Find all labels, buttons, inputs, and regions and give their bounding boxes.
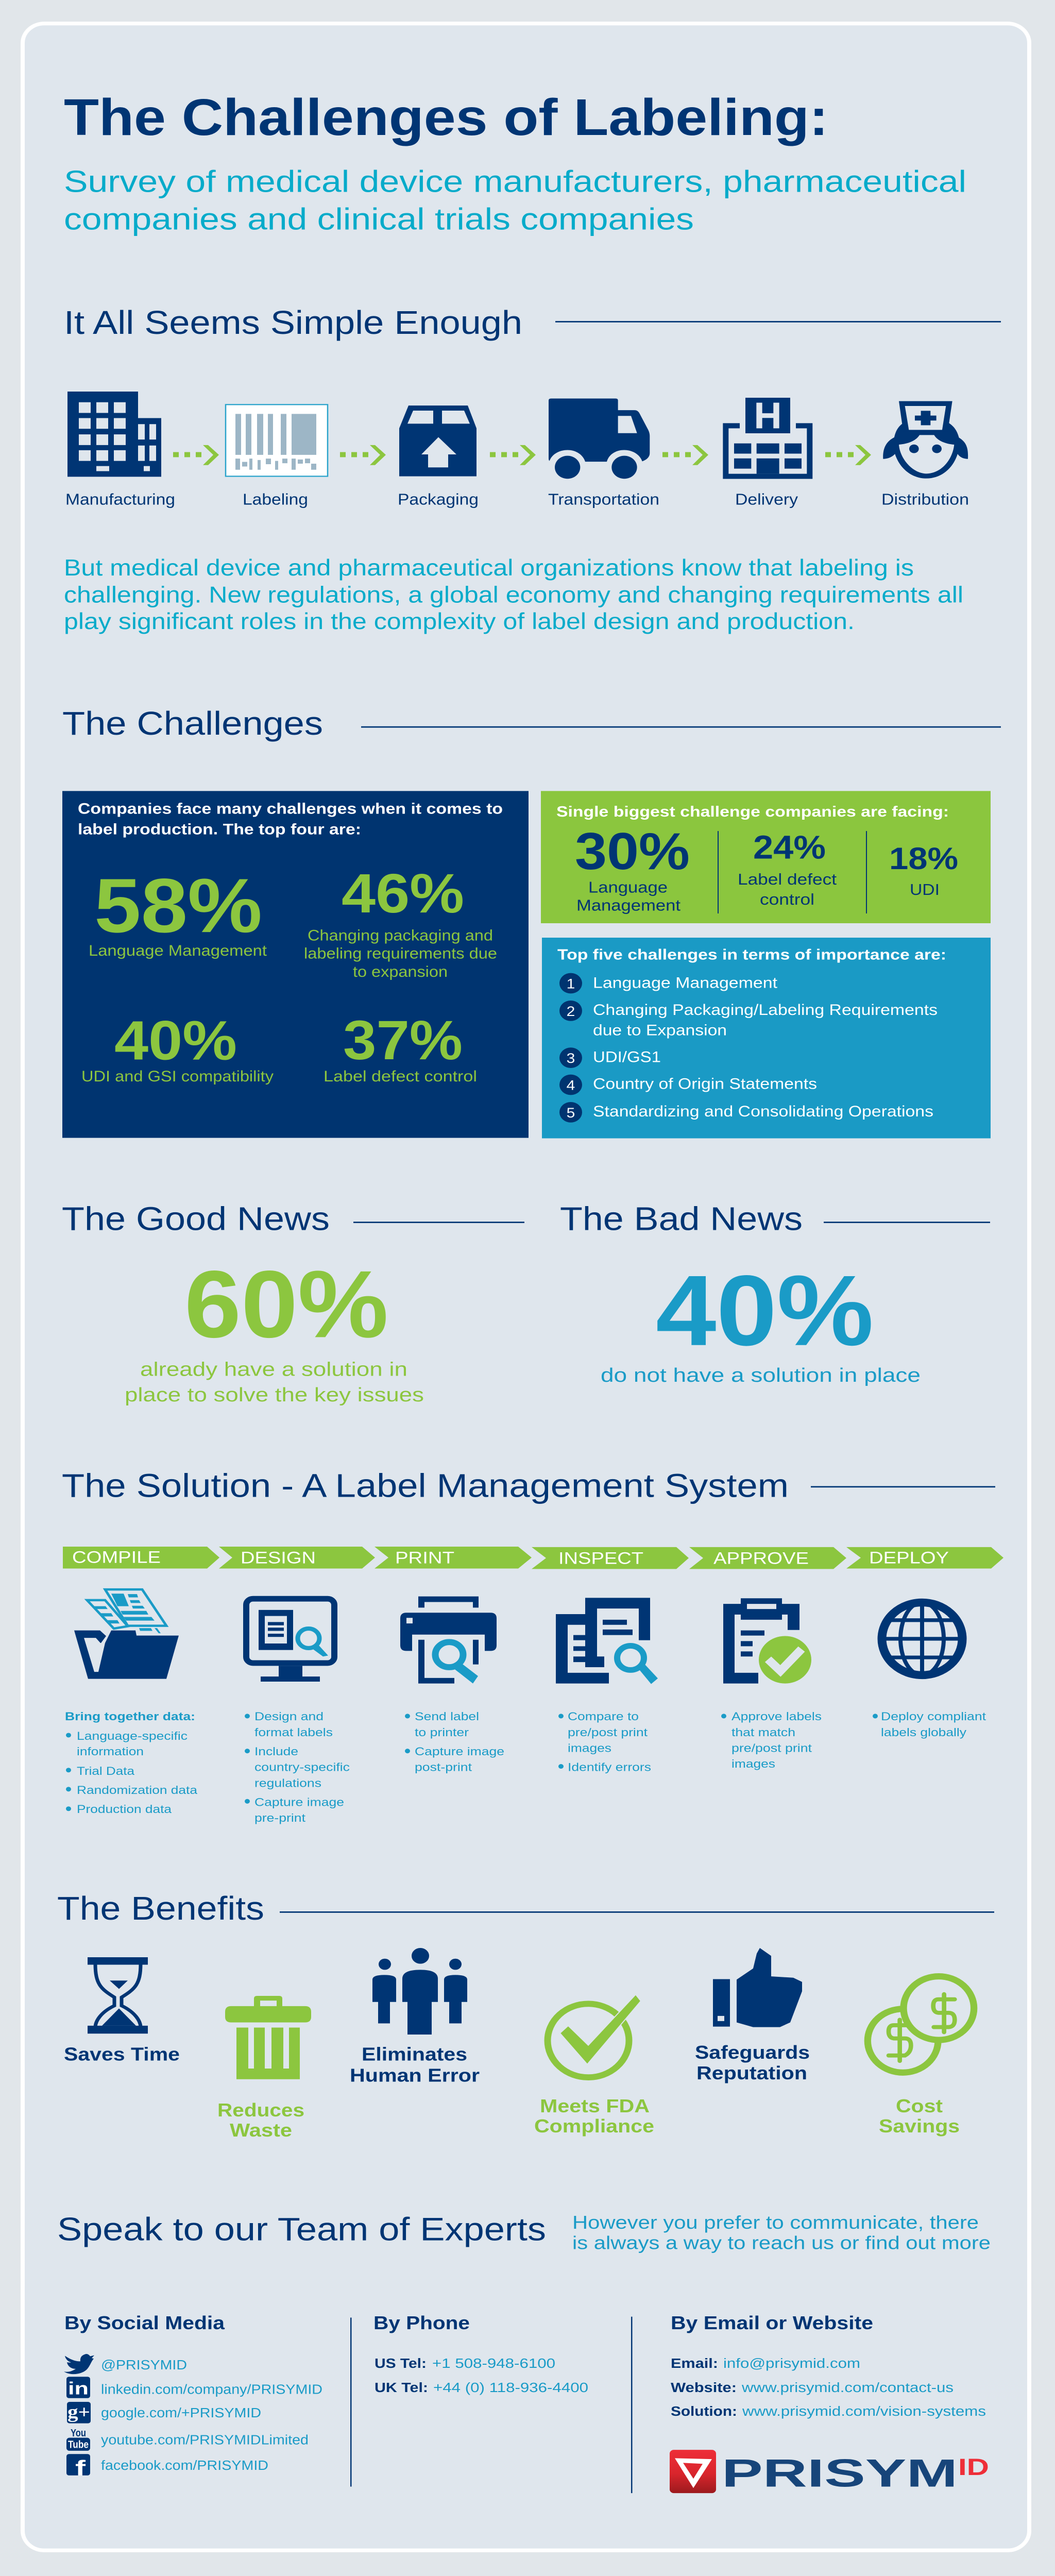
stat: 30%: 30%	[575, 822, 690, 880]
step text: inspect: Identify errors	[568, 1761, 651, 1774]
benefit: saves time: Saves Time	[64, 2044, 180, 2065]
chevron: compile	[63, 1547, 219, 1568]
benefit: reduces waste	[217, 1996, 311, 2141]
logo: PRISYM ID: ID	[958, 2454, 989, 2480]
arrow 5	[825, 445, 871, 465]
chevron: print: PRINT	[395, 1549, 454, 1567]
contact column: social media: By Social Media	[64, 2313, 225, 2334]
contact column: email or website	[671, 2313, 986, 2419]
contact column: email or website: www.prisymid.com/vision-systems	[742, 2403, 986, 2419]
icon: manufacturing	[67, 392, 161, 477]
stat: 37%: Label defect control	[324, 1068, 477, 1085]
contact intro text: However you prefer to communicate, there	[572, 2212, 979, 2233]
heading: Speak to our Team of Experts: Speak to our Team of Experts	[57, 2212, 546, 2248]
icon: barcode label	[226, 404, 328, 476]
step text: inspect: Compare to	[568, 1710, 639, 1723]
process step labels: Delivery	[735, 490, 798, 508]
panel heading: label production. The top four are:	[78, 821, 361, 838]
step text: print: post-print	[415, 1761, 472, 1774]
icon: facebook: f	[75, 2456, 86, 2480]
arrow 2	[340, 445, 386, 465]
stat: 46%: 46%	[342, 862, 464, 925]
chevron: deploy	[846, 1547, 1003, 1568]
step text: design: country-specific	[254, 1761, 350, 1774]
stat: 60% good news: place to solve the key issues	[125, 1384, 424, 1406]
step text: approve	[721, 1710, 822, 1771]
icon: linkedin	[66, 2377, 90, 2398]
process step labels: Distribution	[881, 490, 969, 508]
contact intro text	[572, 2212, 991, 2253]
icon: google plus: g+	[67, 2402, 90, 2422]
list item 1: Language Management	[593, 974, 777, 991]
stat: 30%: Management	[576, 896, 680, 914]
heading: The Solution: The Solution - A Label Management System	[62, 1467, 789, 1504]
contact column: social media: @PRISYMID	[101, 2357, 187, 2372]
icon: globe	[882, 1602, 962, 1675]
icon: truck	[549, 399, 650, 479]
benefit: safeguards reputation: Reputation	[696, 2063, 807, 2083]
heading: The Bad News: The Bad News	[560, 1201, 803, 1238]
heading: The Challenges: The Challenges	[62, 705, 323, 742]
heading: The Good News: The Good News	[62, 1201, 330, 1238]
stat: 58%: Language Management	[89, 942, 267, 959]
icon: trash can	[225, 1996, 311, 2079]
icon: youtube: You	[71, 2427, 86, 2439]
step text: design: Include	[254, 1745, 298, 1758]
step text: compile: information	[77, 1745, 144, 1758]
icon: package	[399, 405, 477, 476]
panel: single biggest challenge	[541, 791, 991, 923]
step text: deploy	[873, 1710, 986, 1739]
step text: deploy: labels globally	[881, 1726, 966, 1739]
chevron: design: DESIGN	[241, 1549, 316, 1567]
stat: 46%	[304, 862, 497, 980]
icon: twitter	[64, 2354, 94, 2374]
step text: design: format labels	[254, 1726, 333, 1739]
contact column: email or website: Email:	[671, 2355, 718, 2371]
stat: 60% good news: 60%	[184, 1251, 388, 1358]
subtitle: Survey of medical device manufacturers, pharmaceutical	[64, 164, 966, 199]
icon: linkedin: in	[68, 2378, 89, 2398]
chevron: design	[219, 1547, 375, 1568]
icon: hourglass	[88, 1957, 148, 2033]
list item 3: 3	[567, 1050, 575, 1066]
step text: inspect: images	[568, 1742, 611, 1755]
panel: top five challenges	[542, 938, 991, 1138]
icon: youtube	[66, 2427, 90, 2451]
stat: 60% good news: already have a solution in	[140, 1359, 407, 1380]
list item 2: Changing Packaging/Labeling Requirements	[593, 1001, 938, 1019]
benefit: cost savings	[867, 1976, 974, 2137]
stat: 40%: 40%	[114, 1010, 237, 1072]
process step labels: Packaging	[398, 490, 479, 508]
step text: compile: Language-specific	[77, 1730, 188, 1743]
step text: print: to printer	[415, 1726, 469, 1739]
step text: approve: that match	[731, 1726, 795, 1739]
stat: 40%: UDI and GSI compatibility	[81, 1068, 274, 1085]
step text: print: Capture image	[415, 1745, 504, 1758]
step text: approve: pre/post print	[731, 1742, 812, 1755]
icon: youtube: Tube	[68, 2438, 89, 2450]
panel heading: Top five challenges in terms of importance are:	[557, 946, 946, 963]
contact column: phone: +44 (0) 118-936-4400	[433, 2380, 588, 2395]
process step labels: Labeling	[243, 490, 308, 508]
contact column: phone: US Tel:	[375, 2355, 427, 2371]
stat: 24%: Label defect	[738, 870, 837, 888]
step text: design: Capture image	[254, 1795, 344, 1809]
contact column: social media: youtube.com/PRISYMIDLimited	[101, 2432, 309, 2447]
icon: check circle	[548, 2004, 629, 2077]
contact column: phone	[373, 2313, 588, 2395]
step text: print	[405, 1710, 504, 1774]
step text: design: pre-print	[254, 1811, 305, 1825]
stat: 40% bad news	[601, 1255, 921, 1386]
contact column: email or website: Website:	[671, 2380, 737, 2395]
subtitle: companies and clinical trials companies	[64, 202, 694, 236]
stat: 40% bad news: 40%	[656, 1255, 874, 1366]
benefit: reduces waste: Waste	[230, 2120, 292, 2141]
stat: 37%: 37%	[343, 1009, 463, 1072]
stat: 30%: Language	[588, 878, 668, 896]
process step labels: Manufacturing	[65, 490, 175, 508]
list item 2	[559, 1001, 938, 1039]
stat: 24%: control	[760, 890, 814, 908]
icon: folder with papers	[74, 1589, 179, 1679]
stat: 46%: to expansion	[353, 963, 448, 980]
benefit: safeguards reputation	[695, 1948, 810, 2083]
subtitle	[64, 164, 966, 236]
step text: inspect: pre/post print	[568, 1726, 648, 1739]
icon: coins	[867, 1976, 974, 2073]
step text: design: Design and	[254, 1710, 324, 1723]
chevron: compile: COMPILE	[72, 1548, 161, 1567]
benefit: cost savings: Savings	[879, 2116, 960, 2137]
arrow 4	[662, 445, 708, 465]
step text: print: Send label	[415, 1710, 479, 1723]
stat: 46%: labeling requirements due	[304, 945, 497, 962]
intro paragraph: challenging. New regulations, a global economy and changing requirements all	[64, 582, 963, 607]
step text: inspect	[558, 1710, 651, 1774]
title: The Challenges of Labeling:	[64, 89, 828, 146]
icon: thumbs up	[713, 1948, 802, 2027]
benefit: cost savings: Cost	[896, 2096, 943, 2116]
step text: compile: Bring together data:	[65, 1710, 195, 1723]
contact column: email or website: www.prisymid.com/contact-us	[741, 2380, 954, 2395]
contact column: social media: linkedin.com/company/PRISYMID	[101, 2382, 322, 2397]
step text: approve: images	[731, 1757, 775, 1771]
logo: PRISYM ID	[670, 2450, 989, 2495]
arrow 3	[490, 445, 536, 465]
benefit: meets FDA compliance: Compliance	[534, 2116, 654, 2137]
list item 5: Standardizing and Consolidating Operations	[593, 1103, 933, 1120]
contact column: phone: By Phone	[373, 2313, 470, 2334]
step text: compile: Production data	[77, 1803, 172, 1816]
step text: design	[245, 1710, 350, 1825]
step text: compile: Trial Data	[77, 1765, 135, 1777]
chevron: approve	[689, 1547, 846, 1569]
stat: 37%	[324, 1009, 477, 1085]
panel heading: Companies face many challenges when it comes to	[78, 800, 503, 817]
stat: 30%	[575, 822, 690, 914]
list item 2: 2	[567, 1004, 575, 1019]
list item 5: 5	[567, 1105, 575, 1121]
step text: compile	[65, 1710, 198, 1816]
step text: deploy: Deploy compliant	[881, 1710, 986, 1723]
stat: 18%	[889, 841, 958, 898]
arrow 1	[173, 445, 219, 465]
intro paragraph: But medical device and pharmaceutical organizations know that labeling is	[64, 555, 914, 580]
benefit: eliminates human error: Human Error	[350, 2065, 480, 2086]
benefit: meets FDA compliance	[534, 1994, 654, 2137]
icon: printer	[400, 1597, 497, 1684]
list item 3	[559, 1047, 661, 1068]
chevron: approve: APPROVE	[713, 1549, 809, 1568]
contact column: email or website: info@prisymid.com	[723, 2355, 860, 2371]
stat: 40%	[81, 1010, 274, 1085]
stat: 18%: 18%	[889, 841, 958, 876]
benefit: saves time	[64, 1957, 180, 2065]
step text: design: regulations	[254, 1776, 321, 1790]
list item 2: due to Expansion	[593, 1022, 727, 1039]
benefit: reduces waste: Reduces	[217, 2100, 304, 2121]
stat: 40% bad news: do not have a solution in place	[601, 1365, 921, 1386]
logo: PRISYM ID: PRISYM	[722, 2451, 958, 2495]
icon: clipboard with check	[723, 1598, 811, 1684]
benefit: meets FDA compliance: Meets FDA	[540, 2096, 650, 2116]
process step labels	[65, 490, 969, 508]
stat: 60% good news	[125, 1251, 424, 1406]
icon: nurse	[883, 401, 968, 479]
stat: 58%: 58%	[94, 863, 262, 948]
panel heading: Single biggest challenge companies are facing:	[556, 803, 949, 820]
panel: top four challenges	[62, 791, 529, 1138]
stat: 24%: 24%	[753, 829, 826, 866]
contact column: email or website: Solution:	[671, 2403, 737, 2419]
icon: documents with magnifier	[556, 1598, 658, 1684]
intro paragraph	[64, 555, 963, 634]
list item 4: 4	[567, 1078, 575, 1093]
process chevrons	[63, 1547, 1003, 1569]
icon: hospital	[723, 398, 812, 479]
stat: 18%: UDI	[910, 880, 940, 898]
contact column: phone: UK Tel:	[375, 2380, 428, 2395]
heading: The Benefits: The Benefits	[57, 1890, 264, 1927]
panel heading	[78, 800, 503, 838]
icon: facebook	[66, 2454, 90, 2480]
intro paragraph: play significant roles in the complexity of label design and production.	[64, 608, 855, 634]
chevron: print	[375, 1547, 532, 1568]
stat: 46%: Changing packaging and	[308, 927, 493, 944]
chevron: inspect: INSPECT	[558, 1549, 643, 1568]
contact intro text: is always a way to reach us or find out more	[572, 2232, 991, 2253]
benefit: eliminates human error	[350, 1948, 480, 2086]
list item 3: UDI/GS1	[593, 1048, 661, 1065]
contact column: social media: google.com/+PRISYMID	[101, 2405, 261, 2420]
icon: monitor	[246, 1599, 334, 1682]
contact column: phone: +1 508-948-6100	[432, 2355, 555, 2371]
step text: compile: Randomization data	[77, 1784, 198, 1797]
heading: It All Seems Simple Enough: It All Seems Simple Enough	[64, 304, 522, 341]
contact column: social media: facebook.com/PRISYMID	[101, 2458, 268, 2473]
step text: approve: Approve labels	[731, 1710, 822, 1723]
benefit: eliminates human error: Eliminates	[362, 2044, 467, 2065]
chevron: inspect	[532, 1547, 689, 1569]
process step labels: Transportation	[548, 490, 659, 508]
contact column: social media	[64, 2313, 322, 2480]
stat: 24%	[738, 829, 837, 908]
benefit: safeguards reputation: Safeguards	[695, 2042, 810, 2063]
list item 1: 1	[567, 976, 575, 992]
list item 4: Country of Origin Statements	[593, 1075, 817, 1092]
icon: people	[372, 1948, 467, 2035]
chevron: deploy: DEPLOY	[869, 1549, 949, 1567]
contact column: email or website: By Email or Website	[671, 2313, 873, 2334]
list item 1	[559, 973, 777, 993]
